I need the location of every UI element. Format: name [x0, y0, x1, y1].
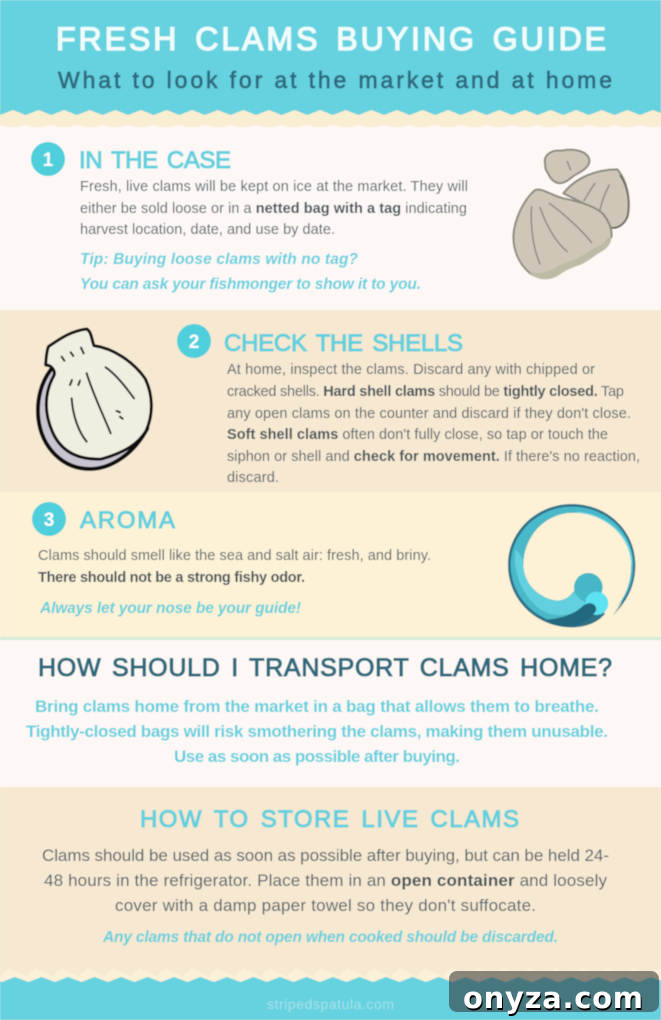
body text: store: 48 hours in the refrigerator. Place them in an open container and loosely [44, 871, 608, 890]
body text: in the case: harvest location, date, and use by date. [80, 222, 335, 238]
body text: check the shells: discard. [227, 470, 279, 486]
panel: header [0, 0, 661, 129]
panel: check the shells [0, 310, 661, 492]
heading: aroma: AROMA [80, 507, 175, 534]
body text: in the case [80, 179, 468, 238]
number badge 3: 3 [44, 510, 54, 531]
tip: aroma: Always let your nose be your guide! [39, 600, 301, 617]
number badge 2 [177, 324, 211, 358]
body text: check the shells [227, 362, 640, 486]
heading: store: HOW TO STORE LIVE CLAMS [140, 806, 519, 833]
body text: check the shells: siphon or shell and check for movement. If there's no reaction, [227, 449, 640, 465]
note: store: Any clams that do not open when cooked should be discarded. [102, 929, 558, 946]
body text: transport: Use as soon as possible after buying. [174, 747, 460, 766]
body text: store: cover with a damp paper towel so they don't suffocate. [115, 896, 536, 915]
footer credit: stripedspatula.com [267, 996, 394, 1012]
icon: clam shells [513, 150, 629, 279]
panel: transport [0, 640, 661, 787]
panel: footer [0, 960, 661, 1020]
body text: aroma [38, 548, 431, 586]
body text: check the shells: cracked shells. Hard shell clams should be tightly closed. Tap [227, 384, 624, 400]
panel: aroma [0, 492, 661, 638]
body text: aroma: There should not be a strong fishy odor. [38, 570, 305, 586]
number badge 1 [31, 142, 65, 176]
number badge 2: 2 [189, 332, 199, 353]
body text: in the case: Fresh, live clams will be kept on ice at the market. They will [80, 179, 468, 195]
watermark: onyza.com [463, 981, 643, 1015]
body text: transport: Tightly-closed bags will risk smothering the clams, making them unusable. [26, 722, 608, 741]
body text: check the shells: At home, inspect the clams. Discard any with chipped or [227, 362, 595, 378]
body text: check the shells: any open clams on the counter and discard if they don't close. [227, 406, 631, 422]
number badge 1: 1 [43, 150, 54, 171]
tip: Tip: Buying loose clams with no tag? [80, 251, 359, 268]
heading: transport: HOW SHOULD I TRANSPORT CLAMS HOME? [38, 654, 612, 682]
body text: transport [26, 697, 608, 766]
body text: check the shells: Soft shell clams often don't fully close, so tap or touch the [227, 427, 608, 443]
subtitle: What to look for at the market and at home [58, 67, 612, 93]
heading: check the shells: CHECK THE SHELLS [224, 330, 463, 357]
title: FRESH CLAMS BUYING GUIDE [56, 21, 606, 57]
body text: aroma: Clams should smell like the sea and salt air: fresh, and briny. [38, 548, 431, 564]
heading: in the case: IN THE CASE [79, 147, 231, 174]
watermark: onyza.com [464, 983, 644, 1017]
panel: store [0, 787, 661, 982]
body text: store [42, 846, 609, 915]
icon: black-outlined clam [38, 329, 151, 469]
number badge 3 [32, 502, 66, 536]
icon: wave [508, 504, 635, 627]
body text: transport: Bring clams home from the market in a bag that allows them to breathe. [35, 697, 599, 716]
watermark [449, 971, 659, 1017]
body text: store: Clams should be used as soon as possible after buying, but can be held 24- [42, 846, 609, 865]
body text: in the case: either be sold loose or in a netted bag with a tag indicating [80, 201, 467, 217]
tip: You can ask your fishmonger to show it to you. [80, 276, 421, 293]
tip [80, 251, 421, 293]
divider line [0, 637, 661, 640]
panel: in the case [0, 127, 661, 310]
